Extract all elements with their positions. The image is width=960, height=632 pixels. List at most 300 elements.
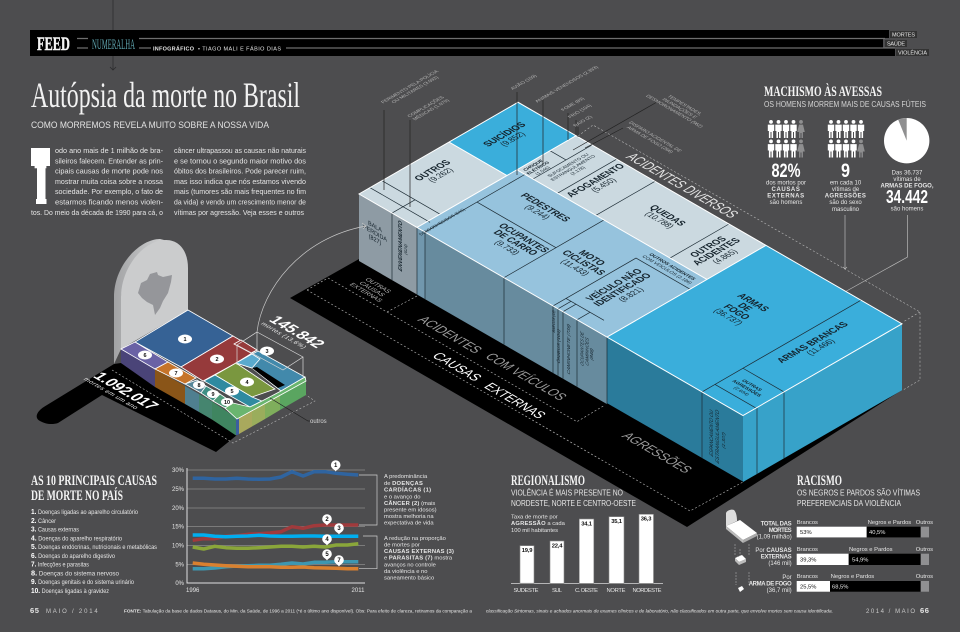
- annotation: external causes and parasites: avanços no controle: [384, 562, 436, 568]
- label: sufocamento: [545, 151, 603, 185]
- grid and axis: 2011: [352, 588, 365, 594]
- label: fome: FOME (89): [560, 97, 587, 112]
- stat: 82%: [766, 160, 806, 206]
- arrow: arc to main block: [257, 223, 366, 332]
- label: choque elétrico: ELÉTRICO: [524, 160, 552, 176]
- label: ocupantes de carro: (9.733): [492, 239, 523, 256]
- label: armas de fogo: (36.737): [711, 307, 746, 327]
- cell 3: light top: [236, 354, 260, 368]
- label: pedestres: (9.244): [522, 203, 553, 221]
- wall labels: [363, 217, 727, 468]
- intro text, column 2: óbitos dos brasileiros. Pode parecer ruim,: [174, 167, 306, 176]
- label: envenenamento: [398, 219, 408, 276]
- list: causes: [31, 507, 157, 595]
- label: motociclistas: CICLISTAS: [559, 249, 608, 277]
- marker 4: 4: [245, 380, 249, 386]
- bar chart: rate per region: 19,9: [522, 548, 533, 554]
- label: veículo não identificado: IDENTIFICADO: [591, 272, 654, 308]
- label: armas brancas: (11.466): [803, 337, 837, 357]
- row labels: Por CAUSAS: [755, 548, 792, 554]
- pie chart: firearms victims: [884, 118, 929, 163]
- label: disparo acidental: DISPARO ACIDENTAL DE: [627, 121, 683, 154]
- note: rate definition: Taxa de morte por: [511, 514, 558, 520]
- label: outras agressões: (2.694): [731, 386, 751, 397]
- grid and axis: 30%: [172, 468, 185, 474]
- panel: regionalismo: [511, 473, 663, 594]
- icon: people 9 in 10: [828, 120, 865, 158]
- label: tempestades: DESMORONAMENTO (962): [644, 94, 704, 129]
- stat: 82%: 82%: [772, 160, 800, 182]
- drop cap T: T: [34, 163, 47, 185]
- row labels: ARMA DE FOGO: [749, 582, 792, 588]
- annotation: heart and cancer: expectativa de vida: [384, 521, 434, 527]
- label: outros: outros: [310, 419, 327, 425]
- dashed band outlines: [307, 125, 920, 511]
- label: tempestades: TEMPESTADES,: [665, 94, 703, 117]
- header bar: [30, 30, 929, 56]
- list: causes: 1. Doenças ligadas ao aparelho circulatório: [31, 507, 138, 516]
- stacked bar: total: 53%: [800, 530, 812, 536]
- label: disparo acidental: ARMA DE FOGO (266): [625, 126, 675, 155]
- annotation: heart and cancer: CARDÍACAS (1): [384, 486, 431, 494]
- annotation: heart and cancer: CÂNCER (2) (mais: [384, 500, 435, 507]
- label: bala perdida: [363, 217, 388, 251]
- drop cap T: [31, 148, 50, 204]
- stacked bar: external causes: [797, 547, 933, 565]
- number markers: [138, 334, 274, 406]
- stat: 9 in 10: em cada 10: [830, 180, 862, 186]
- bar chart: rate per region: 22,4: [552, 544, 563, 550]
- stacked bar: firearms: 68,5%: [832, 584, 848, 590]
- heading: ten causes: DE MORTE NO PAÍS: [31, 487, 123, 504]
- footer: left folio: 65: [30, 606, 40, 615]
- annotation: heart and cancer: e o avanço do: [384, 494, 420, 500]
- label: suicídios: (9.852): [497, 130, 528, 148]
- footer: right folio: 2014 / MAIO: [866, 609, 915, 615]
- stacked bar: external causes: 54,9%: [852, 558, 868, 564]
- category label: outras causas externas: [347, 275, 396, 304]
- intro text, column 2: e se tornou o segundo maior motivo dos: [174, 156, 306, 165]
- pins: [322, 460, 344, 566]
- grid and axis: [172, 468, 365, 594]
- grid and axis: 10%: [172, 544, 185, 550]
- intro text, column 1: mostrar muita coisa sobre a nossa: [55, 177, 164, 186]
- left wall: [121, 349, 236, 436]
- stat: 34.442: 34.442: [886, 187, 928, 207]
- cell 10: gravidez: [213, 394, 233, 408]
- marker 3: 3: [265, 349, 269, 355]
- marker 6: 6: [143, 353, 147, 359]
- intro text, column 2: mais (tumores são mais frequentes no fim: [174, 187, 306, 196]
- label: caminhonete: CAMINHONETE (739): [567, 323, 572, 376]
- label: choque elétrico: [521, 158, 556, 179]
- row labels: MORTES: [769, 528, 792, 534]
- icon: small tombstone funnel: [726, 510, 757, 592]
- bracket: heart and cancer: [359, 475, 377, 525]
- annotation: external causes and parasites: A redução na proporção: [384, 536, 446, 542]
- pin 1: 1: [334, 463, 338, 469]
- list: causes: 7. Infecções e parasitas: [31, 560, 89, 568]
- chart: lines 1996-2011: [172, 460, 454, 594]
- label: frio: FRIO (104): [567, 104, 594, 119]
- title: Autópsia da morte no Brasil: [31, 75, 300, 115]
- label: outras agressões: AGRESSÕES: [730, 379, 764, 398]
- stat: 9 in 10: [825, 160, 866, 213]
- label: complicações médicas: COMPLICAÇÕES: [405, 95, 447, 119]
- heading: ten causes: AS 10 PRINCIPAIS CAUSAS: [31, 473, 157, 489]
- stacked bar: firearms: Outros: [916, 574, 933, 580]
- annotation: heart and cancer: [384, 474, 437, 527]
- marker 8: 8: [197, 383, 201, 389]
- footer: source note: [124, 608, 833, 614]
- label: outros: (9.262): [425, 166, 456, 184]
- top cells: [121, 310, 306, 419]
- heading: ten causes: [31, 473, 157, 504]
- intro text, column 2: [174, 146, 306, 217]
- stacked bar: firearms: [797, 574, 933, 592]
- line 4: respiratório: [193, 544, 358, 549]
- panel: ten main causes: [31, 473, 157, 595]
- grid and axis: 15%: [172, 524, 185, 530]
- stat: 82%: dos mortos por: [766, 180, 806, 186]
- header bar: SAÚDE: [887, 40, 905, 48]
- row labels: (1,09 milhão): [757, 534, 792, 540]
- hole: removed external causes: [252, 367, 285, 388]
- heading: racismo: RACISMO: [797, 473, 842, 489]
- stat: 1.092.017: 1.092.017: [89, 370, 162, 412]
- line 5: endócrinas: [193, 562, 358, 569]
- icon: tombstone: [114, 239, 188, 364]
- label: choque elétrico: (1.546): [534, 166, 553, 176]
- subtitle: COMO MORREMOS REVELA MUITO SOBRE A NOSSA VIDA: [31, 120, 269, 130]
- row labels: EXTERNAS: [761, 554, 792, 560]
- annotation: heart and cancer: A predominância: [384, 474, 428, 480]
- list: causes: 9. Doenças genitais e do sistema urinário: [31, 577, 134, 586]
- label: desconhecidos: DESCONHECIDOS (546): [418, 208, 467, 236]
- label: motociclistas: [551, 244, 616, 281]
- cell: outros strip: [225, 377, 306, 419]
- label: outros: [270, 398, 327, 425]
- lifted outline: external causes: [237, 332, 303, 377]
- subheading: regionalismo: [511, 488, 636, 508]
- arrow: guide line into title: [110, 0, 116, 70]
- subheading: regionalismo: VIOLÊNCIA É MAIS PRESENTE NO: [511, 488, 623, 498]
- label: ferimento pela polícia: FERIMENTO PELA POLÍCIA: [379, 69, 441, 105]
- leader lines for small cells: [384, 92, 657, 207]
- subheading: regionalismo: NORDESTE, NORTE E CENTRO-OESTE: [511, 499, 636, 508]
- stacked bar: external causes: 39,3%: [800, 558, 816, 564]
- stat: 9 in 10: AGRESSÕES: [825, 192, 866, 200]
- marker 7: 7: [174, 371, 178, 377]
- label: sufocamento: (2.178): [569, 166, 588, 176]
- annotation: heart and cancer: mostra melhoria na: [384, 514, 434, 520]
- cell 2: câncer: [181, 336, 257, 381]
- label: tempestades: INUNDAÇÕES E: [660, 97, 700, 120]
- intro text, column 1: cipais causas de morte pode nos: [55, 167, 163, 176]
- top face with cells: [359, 102, 902, 416]
- label: ocupantes de carro: [480, 222, 552, 263]
- footer: left folio: MAIO / 2014: [46, 609, 99, 615]
- cell 6: digestivo: [121, 342, 168, 369]
- footer: left folio: [30, 606, 99, 615]
- label: complicações médicas: MÉDICAS (1.079): [411, 98, 452, 121]
- bar chart: rate per region: 36,3: [641, 516, 652, 522]
- label: outros acidentes: OUTROS: [688, 235, 729, 259]
- subheading: racismo: PREFERENCIAIS DA VIOLÊNCIA: [797, 499, 902, 508]
- label: quedas: (10.788): [643, 210, 677, 230]
- label: afogamento: AFOGAMENTO: [564, 162, 627, 199]
- heading: machismo: MACHISMO ÀS AVESSAS: [764, 83, 882, 100]
- chart: tombstone with causes of death: [37, 223, 366, 452]
- label: ocupantes de caminhões: [580, 330, 595, 373]
- label: sufocamento: ESTRANGULAMENTO: [549, 154, 598, 182]
- label: ocupantes de carro: DE CARRO: [491, 228, 540, 257]
- label: bala perdida: PERDIDA: [363, 223, 388, 244]
- subheading: racismo: OS NEGROS E PARDOS SÃO VÍTIMAS: [797, 488, 920, 498]
- cell 4: respiratório: [215, 363, 275, 397]
- stat: 82%: EXTERNAS: [767, 194, 805, 200]
- cell labels: top face: [412, 121, 858, 401]
- stacked bar: total: [797, 520, 933, 537]
- stat: 9 in 10: masculino: [832, 207, 860, 213]
- label: veículo não identificado: VEÍCULO NÃO: [584, 267, 645, 303]
- note: rate definition: 100 mil habitantes: [511, 528, 558, 534]
- stacked bar: external causes: Negros e Pardos: [849, 547, 893, 553]
- icon: people 82%: [768, 120, 805, 158]
- intro text, column 1: estarmos ficando menos violen-: [55, 198, 164, 206]
- cell 1: circulatório: [135, 310, 233, 367]
- bracket: external causes and parasites: [359, 536, 377, 569]
- pin 4: 4: [325, 537, 329, 543]
- label: motociclistas: (11.433): [558, 258, 592, 277]
- dashed outline: total block: [112, 370, 315, 443]
- stacked bar: firearms: 25,5%: [800, 584, 816, 590]
- label: avião: AVIÃO (159): [509, 73, 539, 91]
- intro text, column 2: mas isso indica que nós estamos vivendo: [174, 177, 306, 186]
- header bar: INFOGRÁFICO: [153, 46, 195, 52]
- marker 10: 10: [224, 400, 230, 406]
- annotation: external causes and parasites: [384, 536, 454, 582]
- grid and axis: 0%: [175, 581, 185, 587]
- stat: 9 in 10: 9: [841, 160, 850, 182]
- annotation: heart and cancer: presente em idosos): [384, 508, 437, 514]
- panel: machismo às avessas: [764, 83, 934, 298]
- footer: source note: FONTE: Tabulação da base de dados Datasus, do Min. da Saúde, de 1996 a 2011 (*é o último ano disponível). Obs: Para efeito de clareza, retiramos da comparação a: [124, 608, 472, 614]
- list: causes: 3. Causas externas: [31, 524, 79, 534]
- bar chart: rate per region: NORDESTE: [632, 588, 662, 594]
- label: armas de fogo: FOGO: [721, 303, 752, 321]
- label: choque elétrico: CHOQUE: [522, 159, 545, 172]
- category label: acidentes diversos: ACIDENTES DIVERSOS: [622, 151, 742, 221]
- stacked bar: total: Negros e Pardos: [868, 520, 911, 526]
- label: armas brancas: ARMAS BRANCAS: [774, 320, 851, 364]
- category label: outras causas externas: EXTERNAS: [347, 282, 384, 304]
- line 2: câncer: [193, 525, 358, 540]
- line 3: causas externas: [193, 535, 358, 537]
- row labels: TOTAL DAS: [761, 522, 792, 528]
- stat: 82%: são homens: [770, 200, 802, 206]
- chart: 3D isometric block of external causes: [290, 65, 920, 527]
- label: outros acidentes: (4.865): [709, 247, 740, 265]
- cell 7: infecções: [155, 362, 196, 384]
- list: causes: 4. Doenças do aparelho respiratório: [31, 533, 122, 542]
- list: causes: 2. Câncer: [31, 516, 56, 525]
- intro text, column 1: odo ano mais de 1 milhão de bra-: [55, 146, 163, 155]
- label: outros acidentes com veículos: COM VEÍCULOS (2.186): [640, 254, 694, 286]
- pin 7: 7: [337, 558, 341, 564]
- bar chart: rate per region: 34,1: [581, 522, 593, 528]
- intro text, column 2: da vida) e vendo um crescimento menor de: [174, 198, 306, 206]
- stat: 34.442: Das 36.737: [892, 170, 923, 176]
- list: causes: 5. Doenças endócrinas, nutricionais e metabólicas: [31, 542, 157, 551]
- list: causes: 8. Doenças do sistema nervoso: [31, 568, 119, 577]
- wall: right side: [743, 324, 902, 482]
- pin 5: 5: [325, 552, 329, 558]
- annotation: external causes and parasites: da violência e no: [384, 569, 428, 575]
- grid and axis: 5%: [175, 562, 185, 568]
- cell 8: nervoso: [185, 380, 206, 393]
- label: outros acidentes: ACIDENTES: [690, 236, 743, 267]
- label: bala perdida: (827): [369, 233, 381, 247]
- label: ocupantes de caminhões: OCUPANTES DE: [580, 330, 585, 368]
- intro text, column 2: vítimas por agressão. Veja esses e outros: [174, 208, 304, 217]
- bar chart: rate per region: C. OESTE: [575, 588, 598, 594]
- stacked bar: total: Brancos: [797, 520, 818, 526]
- label: envenenamento: ENVENENAMENTO: [398, 219, 404, 273]
- shadow: black floor: [37, 363, 237, 452]
- label: espancamento: [709, 405, 727, 468]
- annotation: external causes and parasites: CAUSAS EXTERNAS (3): [384, 549, 454, 555]
- label: pedestres: PEDESTRES: [518, 192, 573, 223]
- intro text, column 2: câncer ultrapassou as causas não naturais: [174, 146, 306, 155]
- stacked bar: firearms: Negros e Pardos: [831, 574, 874, 580]
- intro text, column 1: [31, 146, 164, 217]
- note: rate definition: [511, 514, 566, 534]
- annotation: external causes and parasites: de mortes por: [384, 542, 420, 548]
- label: espancamento: ESPANCAMENTO OU: [709, 408, 715, 458]
- row labels: [749, 522, 792, 594]
- cell: red inset outline: [234, 340, 257, 353]
- stat: 9 in 10: vítimas de: [832, 187, 860, 193]
- cell 3: causas externas: [236, 351, 305, 391]
- footer: right folio: 66: [920, 606, 930, 615]
- header bar: NUMERALHA: [92, 37, 135, 53]
- footer: source note: classificação Sintomas, sinais e achados anormais de exames clínicos e de laboratório, não classificados em outra parte, que envolve mortes sem causa identificada.: [486, 608, 833, 614]
- category label: agressões: AGRESSÕES: [618, 430, 696, 475]
- stat: 34.442: [880, 170, 934, 212]
- stat: 9 in 10: são do sexo: [829, 200, 862, 206]
- stacked bar: external causes: Outros: [916, 547, 933, 553]
- list: causes: 10. Doenças ligadas à gravidez: [31, 586, 109, 595]
- marker 2: 2: [215, 357, 219, 363]
- label: animais venenosos: ANIMAIS VENENOSOS (2.393): [534, 65, 601, 104]
- marker 9: 9: [211, 392, 215, 398]
- category label: outras causas externas: CAUSAS: [357, 281, 387, 298]
- line 1: circulatório: [193, 472, 358, 479]
- stat: 145.842: mortes (13,6%): [259, 322, 308, 350]
- panel: racismo: [726, 473, 933, 594]
- annotation: external causes and parasites: e PARASITAS (7) mostra: [384, 556, 453, 562]
- leader labels above block: [379, 65, 715, 157]
- row labels: Por: [782, 575, 792, 581]
- annotation: heart and cancer: de DOENÇAS: [384, 481, 423, 487]
- base: black floor: [290, 259, 902, 527]
- label: ocupantes de carro: OCUPANTES: [496, 222, 552, 254]
- category label: acidentes: ACIDENTES: [414, 314, 486, 355]
- row labels: (146 mil): [768, 561, 792, 567]
- grid and axis: 25%: [172, 487, 185, 493]
- bar chart: rate per region: [511, 514, 663, 594]
- stat: 34.442: são homens: [891, 206, 923, 212]
- label: suicídios: SUICÍDIOS: [481, 121, 528, 148]
- intro text, column 1: sociedade. Por exemplo, o fato de: [55, 187, 163, 196]
- header bar: MORTES: [892, 32, 915, 38]
- label: outros acidentes com veículos: OUTROS ACIDENTES: [647, 253, 697, 282]
- category label: outras causas externas: OUTRAS: [363, 277, 393, 295]
- bar chart: rate per region: 35,1: [611, 519, 623, 525]
- header bar: • TIAGO MALI E FÁBIO DIAS: [198, 46, 281, 52]
- stacked bar: firearms: Brancos: [797, 574, 818, 580]
- label: ocupantes de caminhões: (848): [590, 347, 595, 362]
- bar chart: rate per region: SUL: [552, 588, 563, 594]
- footer: right folio: [866, 606, 930, 615]
- grid and axis: 1996: [186, 588, 200, 594]
- label: outros acidentes: [682, 232, 751, 272]
- cell 9: geniturinário: [201, 386, 220, 401]
- annotation: external causes and parasites: saneamento básico: [384, 576, 434, 582]
- heading: regionalismo: REGIONALISMO: [511, 473, 585, 489]
- category label: com veículos: COM VEÍCULOS: [482, 351, 571, 402]
- row labels: (36,7 mil): [767, 588, 792, 594]
- wall: left side: [359, 194, 743, 483]
- label: veículo não identificado: [583, 267, 662, 312]
- label: ferimento pela polícia: OU MILITARES (3.092): [390, 75, 441, 104]
- label: outras agressões: [725, 376, 768, 401]
- label: armas de fogo: [710, 292, 772, 327]
- marker 5: 5: [230, 389, 234, 395]
- marker 1: 1: [183, 337, 187, 343]
- note: rate definition: AGRESSÃO a cada: [511, 520, 566, 527]
- category label: externas: EXTERNAS: [481, 380, 550, 421]
- stacked bar: external causes: Brancos: [797, 547, 818, 553]
- stat: 34.442: vítimas de: [893, 177, 921, 183]
- label: veículo não identificado: (8.821): [615, 285, 646, 303]
- stacked bar: total: Outros: [916, 520, 933, 526]
- label: armas de fogo: ARMAS: [735, 292, 772, 313]
- label: outras agressões: OUTRAS: [740, 379, 764, 393]
- header bar: FEED: [37, 34, 70, 55]
- grid and axis: 20%: [172, 506, 185, 512]
- label: motociclistas: MOTO: [576, 249, 608, 267]
- pin 2: 2: [325, 517, 329, 523]
- pin 3: 3: [337, 526, 341, 532]
- label: raio: RAIO (2): [572, 115, 595, 128]
- label: ocupantes de caminhões: CAMINHÕES: [584, 335, 590, 367]
- header bar: VIOLÊNCIA: [898, 48, 927, 56]
- cell 5: endócrinas: [204, 375, 262, 407]
- intro text, column 1: tos. Do meio da década de 1990 para cá, o: [31, 208, 163, 217]
- subheading: racismo: [797, 488, 920, 508]
- label: afogamento: (5.450): [588, 176, 619, 194]
- label: quedas: QUEDAS: [647, 203, 688, 227]
- label: barcos: BARCOS (19): [552, 309, 556, 334]
- label: ônibus: ÔNIBUS (104): [556, 327, 561, 365]
- subheading: machismo: OS HOMENS MORREM MAIS DE CAUSAS FÚTEIS: [764, 100, 926, 109]
- stat: 145.842: 145.842: [265, 314, 328, 351]
- label: espancamento: (1.307): [721, 431, 727, 450]
- label: outros: OUTROS: [412, 158, 453, 182]
- arrows: stats to 3D block: [834, 215, 908, 298]
